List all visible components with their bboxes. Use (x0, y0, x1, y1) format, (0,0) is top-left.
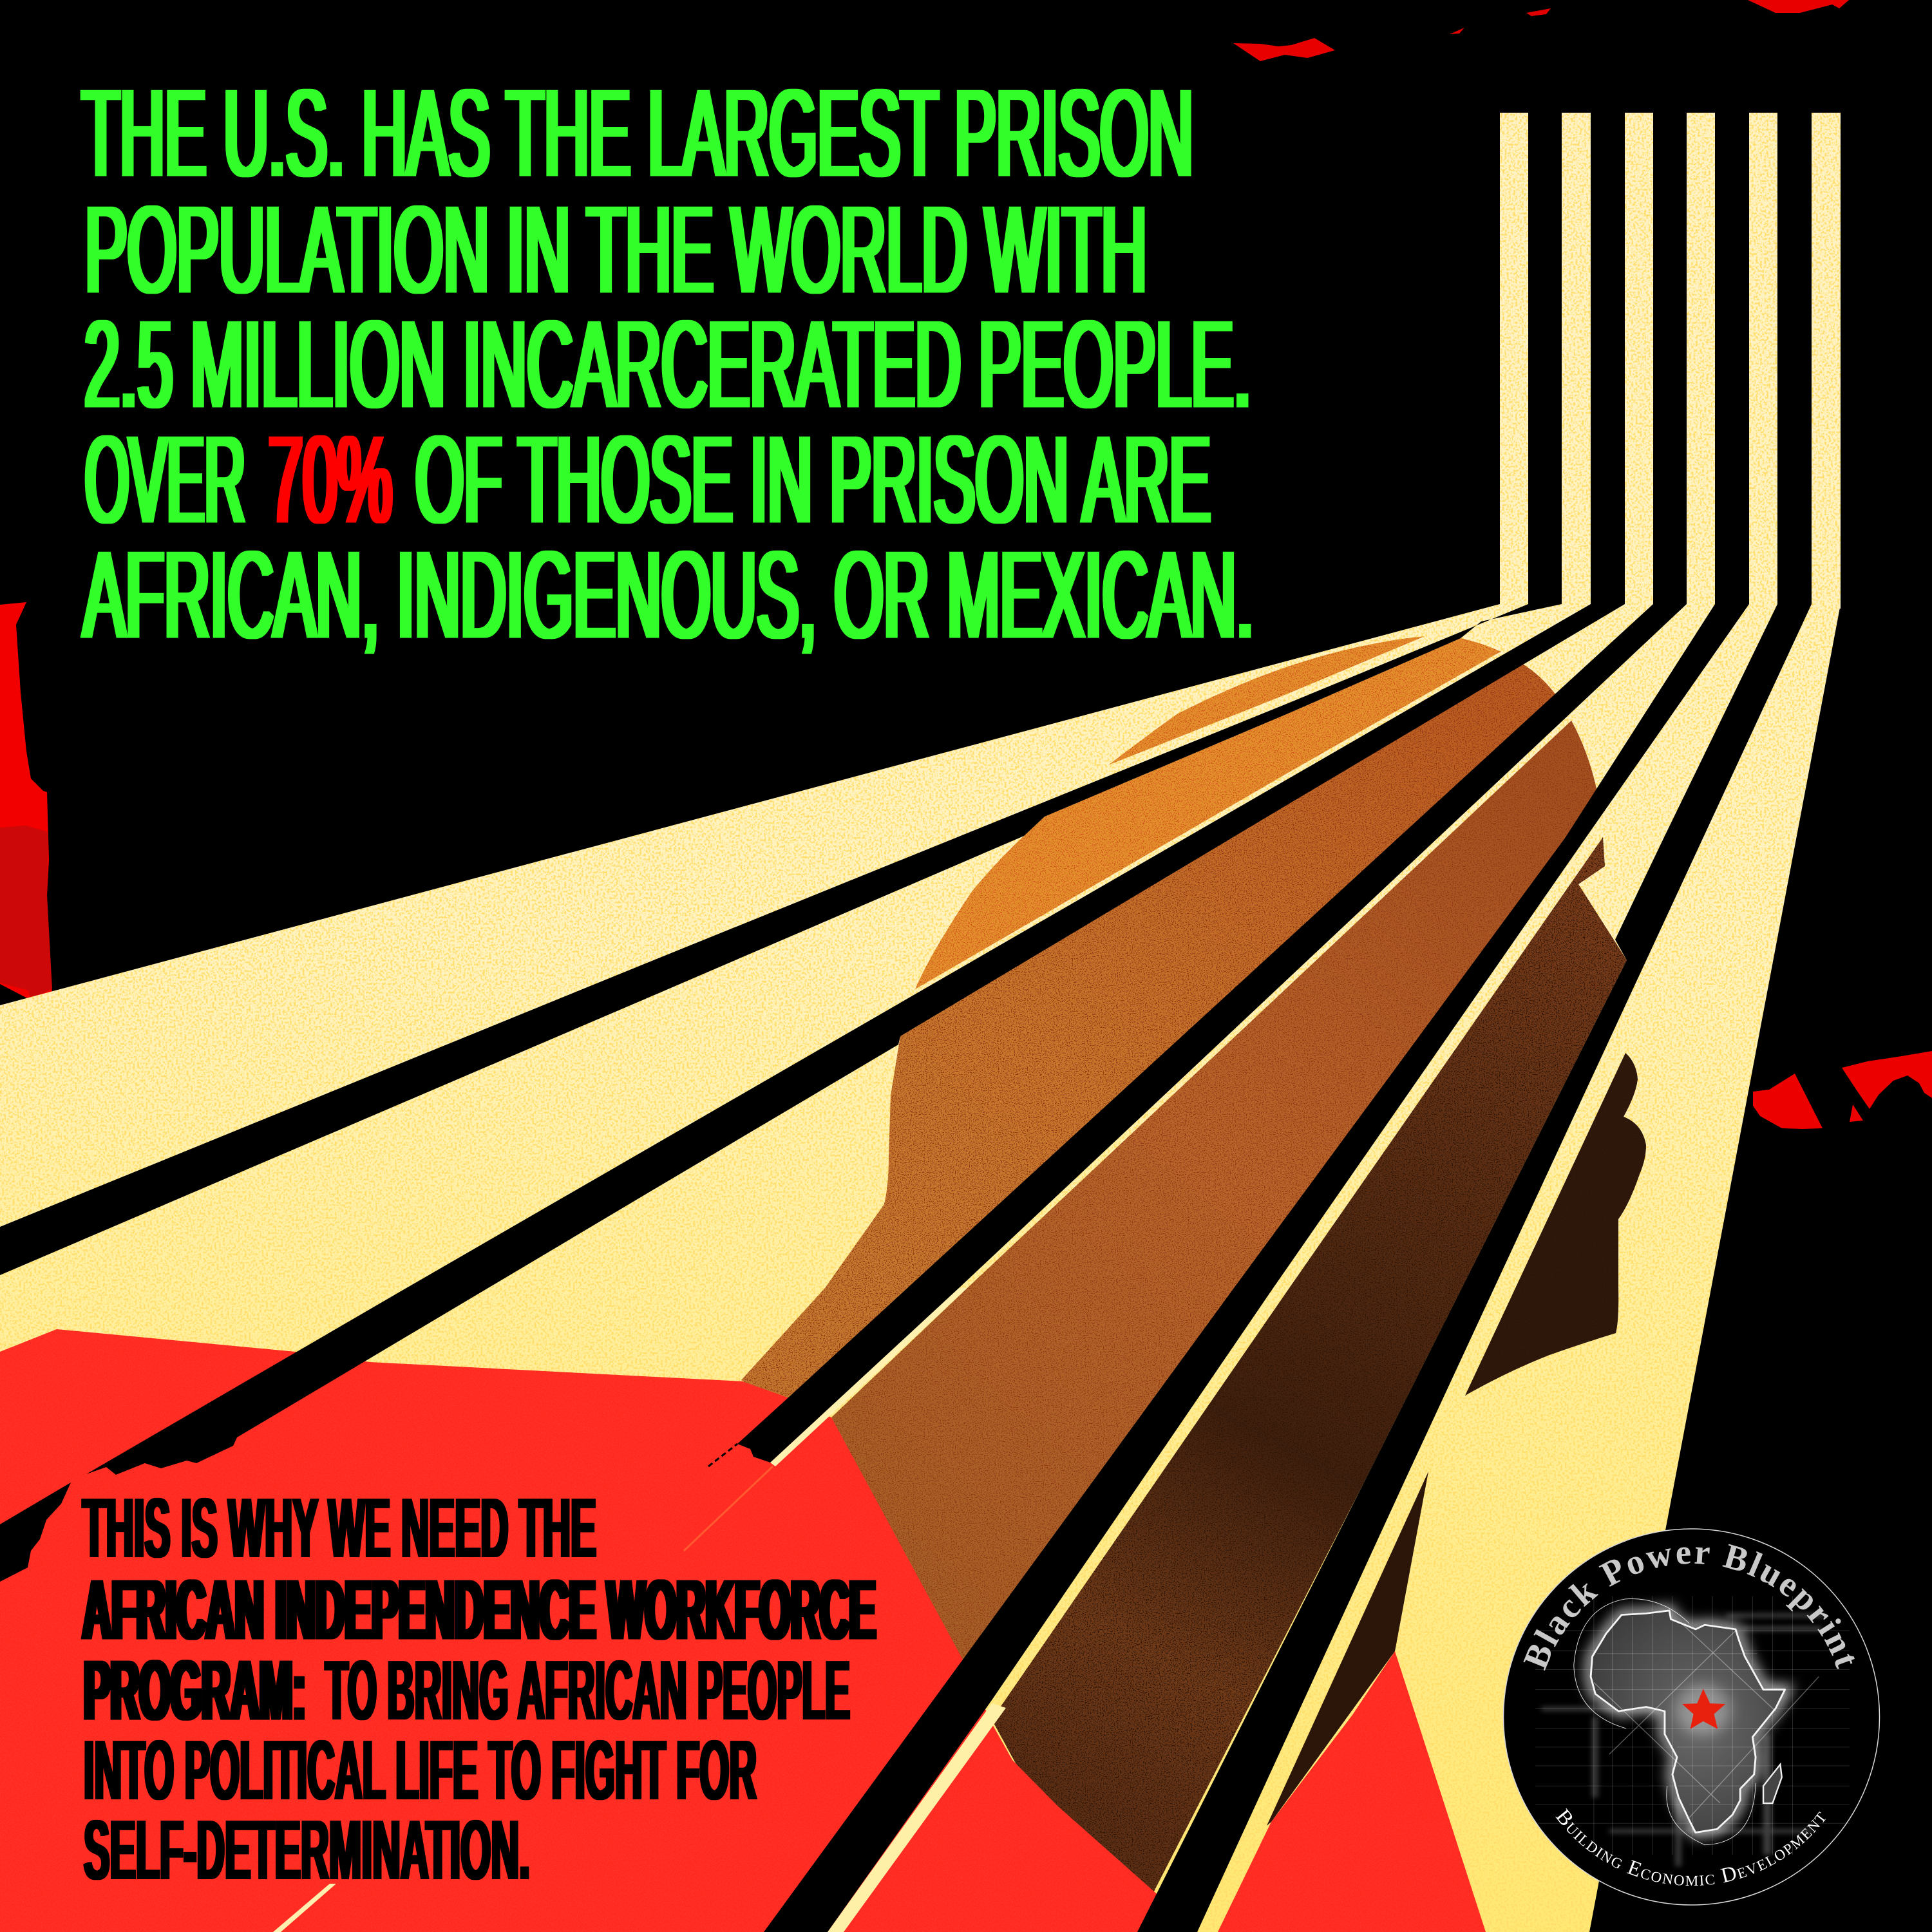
head: strip 1 and 2 orange (915, 636, 1501, 989)
red shirt (0, 1329, 1486, 1932)
logo tagline: Building Economic Development (1555, 1808, 1826, 1886)
call to action text: INTO POLITICAL LIFE TO FIGHT FOR (84, 1723, 757, 1817)
red fragment: right edge (1753, 1051, 1932, 1129)
thin cream highlights (273, 1288, 1006, 1932)
logo disc (1503, 1529, 1879, 1905)
headline: U.S. prison population (82, 63, 1254, 664)
bar stripe 5 (1137, 604, 1812, 1932)
head: strip 4 (831, 721, 1598, 1668)
logo title: Black Power Blueprint (1523, 1544, 1855, 1671)
call to action text: THIS IS WHY WE NEED THE (82, 1481, 596, 1575)
icon: map of Africa with star (1535, 1596, 1850, 1866)
text: AFRICAN INDEPENDENCE WORKFORCE (82, 1562, 876, 1657)
bar stripe 2 with torn end (86, 604, 1625, 1475)
call to action text: SELF-DETERMINATION. (84, 1803, 530, 1897)
headline: U.S. prison population: 70% (269, 410, 392, 549)
thin orbit arcs (1574, 1599, 1756, 1845)
head silhouette seen through the bars (741, 636, 1646, 1906)
face profile in shadow (1465, 1053, 1646, 1396)
text: TO BRING AFRICAN PEOPLE (325, 1643, 850, 1738)
bar stripe 4 (764, 604, 1749, 1932)
bar stripe 3 with torn end (737, 604, 1687, 1463)
call to action text: PROGRAM: (84, 1643, 306, 1738)
red star glow (1676, 1684, 1731, 1736)
red fragment: top right (1748, 0, 1849, 13)
bar stripe 3 dashed tail (708, 1444, 737, 1466)
head: strip 3 (741, 663, 1558, 1407)
headline: U.S. prison population: OVER (85, 410, 245, 549)
red fragment: small top specks (1450, 8, 1551, 34)
red fragment: left edge (0, 602, 52, 1000)
red fragment: top centre (1233, 38, 1335, 61)
head: strip 5 shadowed (992, 837, 1627, 1906)
torn red paper fragments (0, 0, 1932, 1129)
black prison bar stripes (0, 604, 1812, 1932)
Africa outer glow (1591, 1611, 1785, 1833)
logo: Black Power Blueprint badge (1503, 1528, 1880, 1906)
blueprint grid (1535, 1596, 1850, 1855)
blurred light streaks (1542, 1613, 1825, 1866)
Africa silhouette (1591, 1611, 1785, 1833)
red star (1682, 1689, 1725, 1729)
call to action text (82, 1481, 876, 1897)
bar stripe 2 lower torn piece (0, 1482, 71, 1582)
continent grid overlay (1594, 1613, 1819, 1832)
Madagascar (1763, 1765, 1782, 1803)
shoulder shadow (1267, 1472, 1428, 1826)
bar stripe 1 (0, 604, 1562, 1275)
